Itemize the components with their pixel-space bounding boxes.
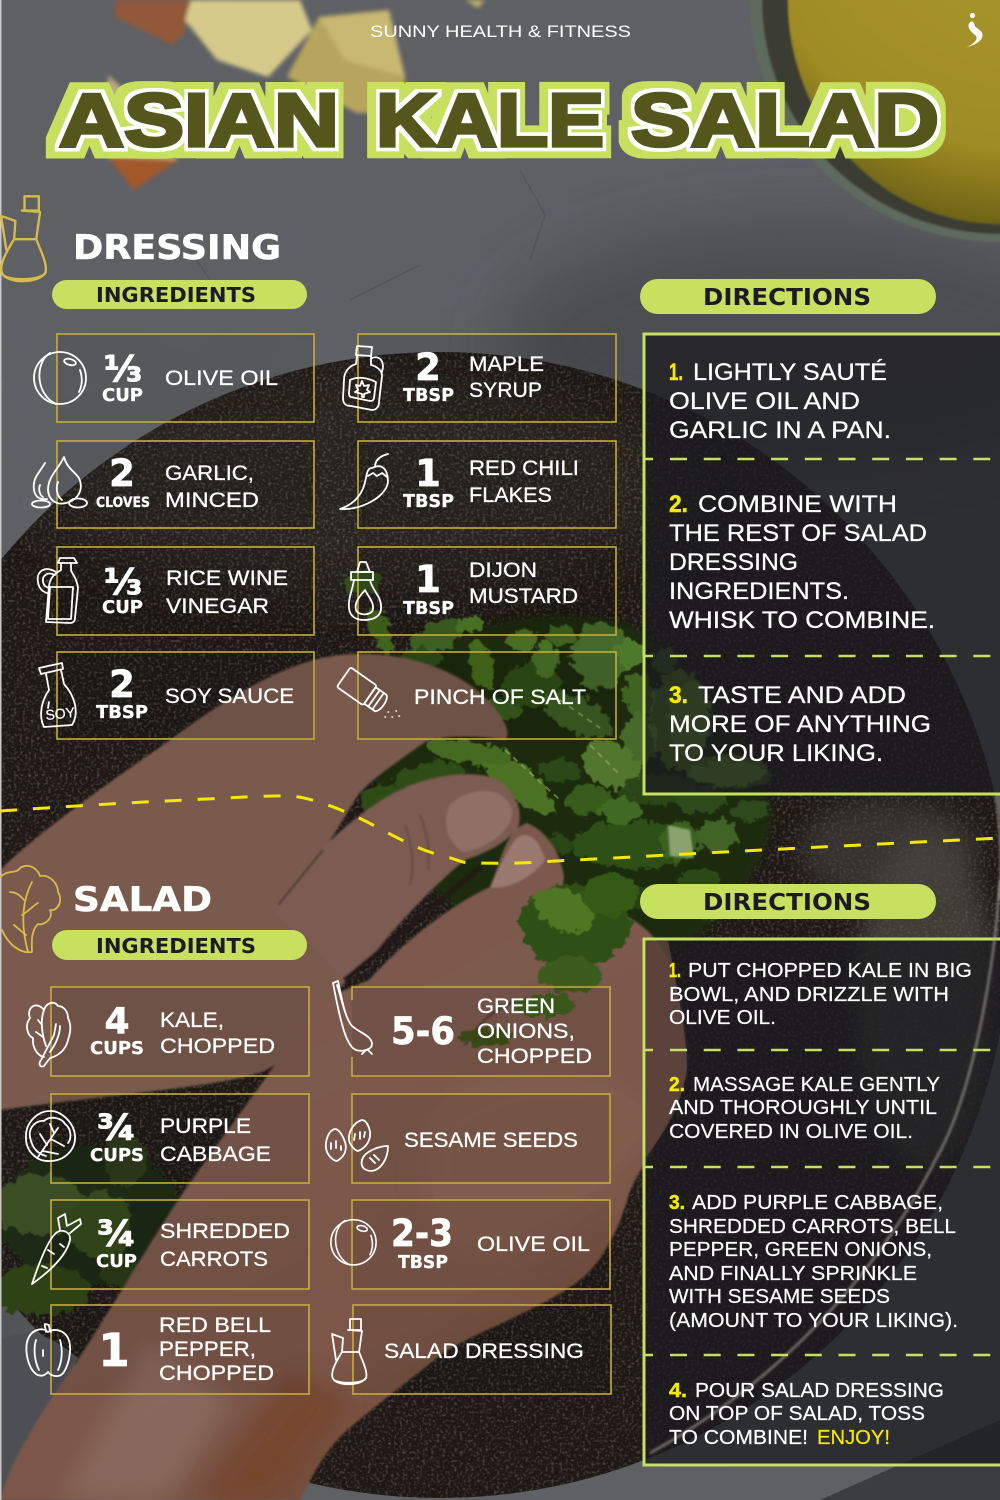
step 2: 2. [669,491,688,518]
icon: chili [340,454,388,509]
left kale in wedge [0,1134,180,1316]
step 2: MASSAGE KALE GENTLY [693,1074,940,1096]
dashed wave divider [0,796,1000,863]
kale behind hands [344,570,772,965]
label [159,1314,274,1385]
amount: TBSP [398,1252,448,1273]
step 2: INGREDIENTS. [669,578,849,605]
label: SALAD DRESSING [384,1340,584,1363]
amount: CUPS [90,1038,144,1059]
card: sesame seeds [326,1094,610,1183]
card: red bell pepper [26,1305,309,1394]
step 1: 1. [669,960,681,982]
section: salad ingredients [0,866,611,1394]
step 2: 2. [669,1074,685,1096]
icon: dressing bottle [1,196,46,281]
amount [96,452,150,511]
amount [90,1108,144,1166]
card: kale [27,987,309,1076]
step 2 [669,491,935,634]
amount: ¾ [97,1214,136,1255]
card: dijon mustard [349,547,616,635]
amount: TBSP [403,385,454,406]
title: ASIAN [59,78,339,162]
label [469,559,578,608]
pill: directions [640,279,936,314]
step 3: AND FINALLY SPRINKLE [669,1263,917,1285]
step 1: PUT CHOPPED KALE IN BIG [688,960,972,982]
amount: CLOVES [96,495,150,511]
amount: ⅓ [104,349,142,390]
icon: brand logo [966,13,982,47]
step 3 [669,682,931,767]
label: CARROTS [160,1248,268,1271]
label [160,1115,271,1166]
label: FLAKES [469,484,552,507]
step 4: ON TOP OF SALAD, TOSS [669,1403,925,1425]
hands [0,654,688,1500]
amount [96,663,148,723]
label: SYRUP [469,379,542,402]
label [165,462,259,512]
amount: ⅓ [104,562,142,603]
icon: carrot [32,1214,81,1284]
amount: 1 [98,1324,130,1377]
label [166,567,288,618]
amount: ¾ [97,1108,136,1149]
label: PURPLE [160,1115,251,1138]
step 4: POUR SALAD DRESSING [695,1380,944,1402]
label: GREEN [477,995,555,1018]
pill: ingredients [52,280,307,309]
label: KALE, [160,1009,224,1032]
label: OLIVE OIL [477,1233,590,1256]
pill: directions [640,884,936,919]
card: purple cabbage [26,1094,309,1183]
card: olive oil [34,334,314,422]
amount: 2 [415,346,441,389]
brand name: SUNNY HEALTH & FITNESS [370,23,631,41]
step 1: BOWL, AND DRIZZLE WITH [669,984,949,1006]
card: red chili flakes [340,441,616,528]
pill: ingredients [52,930,307,960]
amount [96,1214,137,1272]
step 2: DRESSING [669,549,798,576]
amount: TBSP [96,702,148,723]
label: CHOPPED [160,1035,275,1058]
step 1: OLIVE OIL. [669,1007,776,1029]
amount [102,562,143,618]
icon: garlic [32,457,87,508]
pill: directions: DIRECTIONS [703,890,871,916]
step 2: THE REST OF SALAD [669,520,927,547]
card: shredded carrots [32,1200,309,1289]
step 3: MORE OF ANYTHING [669,711,931,738]
label: ONIONS, [477,1020,575,1043]
icon: cabbage [26,1111,75,1161]
card: garlic [32,441,314,528]
amount [90,1001,144,1059]
step 4: 4. [669,1380,687,1402]
card: olive oil [331,1200,610,1289]
amount: CUP [96,1251,137,1272]
step 2: WHISK TO COMBINE. [669,607,935,634]
label: RICE WINE [166,567,288,590]
label [160,1220,290,1271]
heading: dressing: DRESSING [73,228,281,268]
icon: sesame seeds [326,1120,388,1171]
step 1: OLIVE OIL AND [669,388,860,415]
amount [403,452,454,512]
icon: kale [27,1003,70,1067]
pill: directions: DIRECTIONS [703,285,871,311]
title: KALE [376,78,604,162]
step 1: 1. [669,359,683,386]
step 3: 3. [669,682,688,709]
label: OLIVE OIL [165,367,278,390]
amount: 2-3 [391,1212,453,1255]
dressing bowl [750,0,1000,242]
amount: 1 [415,452,441,495]
card: maple syrup [343,334,616,422]
label: SOY SAUCE [165,685,294,708]
heading: salad: SALAD [73,880,212,920]
step 3: TO YOUR LIKING. [669,740,883,767]
icon: green onion [333,981,372,1054]
card: soy sauce [39,652,314,739]
icon: dressing bottle [332,1319,366,1384]
step 4: TO COMBINE! [669,1427,808,1449]
vegetable cubes [108,0,485,190]
step 3: 3. [669,1192,685,1214]
label: PEPPER, [159,1338,256,1361]
pill: ingredients: INGREDIENTS [96,283,256,307]
step 2: AND THOROUGHLY UNTIL [669,1097,937,1119]
icon: vinegar bottle [38,558,78,623]
label: VINEGAR [166,595,269,618]
icon: lettuce [0,866,60,952]
step 1: GARLIC IN A PAN. [669,417,891,444]
plate [2,352,1000,1498]
title [59,78,939,162]
kale in front of fingers [459,873,638,1047]
amount: TBSP [403,598,454,619]
amount: CUP [102,597,143,618]
amount: 2 [109,452,135,495]
amount: CUP [102,385,143,406]
step 3: ADD PURPLE CABBAGE, [692,1192,943,1214]
step 3: (AMOUNT TO YOUR LIKING). [669,1310,958,1332]
icon: maple syrup jug [343,346,383,410]
label [477,995,592,1068]
step 3: WITH SESAME SEEDS [669,1286,890,1308]
card: green onions [333,981,610,1076]
icon: olive [331,1220,376,1265]
label: SESAME SEEDS [404,1129,578,1152]
label: GARLIC, [165,462,254,485]
icon: olive [34,352,86,404]
icon: mustard bottle [349,562,381,620]
section: dressing ingredients [1,196,616,739]
label: CHOPPED [159,1362,274,1385]
card: salad dressing [332,1305,611,1394]
step 1: LIGHTLY SAUTÉ [693,359,887,386]
card: rice wine vinegar [38,547,314,635]
step 3: SHREDDED CARROTS, BELL [669,1216,956,1238]
step 2 [669,1074,940,1143]
step 3 [669,1192,958,1332]
amount: 4 [104,1001,130,1042]
amount [391,1212,453,1273]
amount [102,349,143,406]
step 1 [669,359,891,444]
amount: CUPS [90,1145,144,1166]
label [469,457,579,507]
pill: ingredients: INGREDIENTS [96,934,256,958]
label: PINCH OF SALT [414,686,586,709]
amount: TBSP [403,491,454,512]
step 3: TASTE AND ADD [698,682,906,709]
label [160,1009,275,1058]
step 4 [669,1380,944,1449]
left stone patch [0,1333,78,1500]
icon: soy sauce bottle: SOY [45,704,76,723]
icon: soy sauce bottle [39,663,76,727]
label [469,353,544,402]
amount [403,558,454,619]
amount [403,346,454,406]
label: CABBAGE [160,1143,271,1166]
label: RED BELL [159,1314,271,1337]
label: SHREDDED [160,1220,290,1243]
amount: 1 [415,558,441,601]
amount: 2 [109,663,135,706]
label: MINCED [165,489,259,512]
card: pinch of salt [337,652,616,739]
step 2: COVERED IN OLIVE OIL. [669,1121,913,1143]
panel: salad directions [640,880,1000,1465]
title: SALAD [631,78,939,162]
label: CHOPPED [477,1045,592,1068]
step 1 [669,960,972,1029]
icon: bell pepper [26,1324,70,1376]
panel: dressing directions [640,279,1000,794]
label: DIJON [469,559,537,582]
amount: 5-6 [391,1010,455,1053]
step 4: ENJOY! [817,1427,890,1449]
step 2: COMBINE WITH [698,491,897,518]
icon: salt shaker [337,667,400,717]
label: MAPLE [469,353,544,376]
step 3: PEPPER, GREEN ONIONS, [669,1239,932,1261]
label: RED CHILI [469,457,579,480]
label: MUSTARD [469,585,578,608]
